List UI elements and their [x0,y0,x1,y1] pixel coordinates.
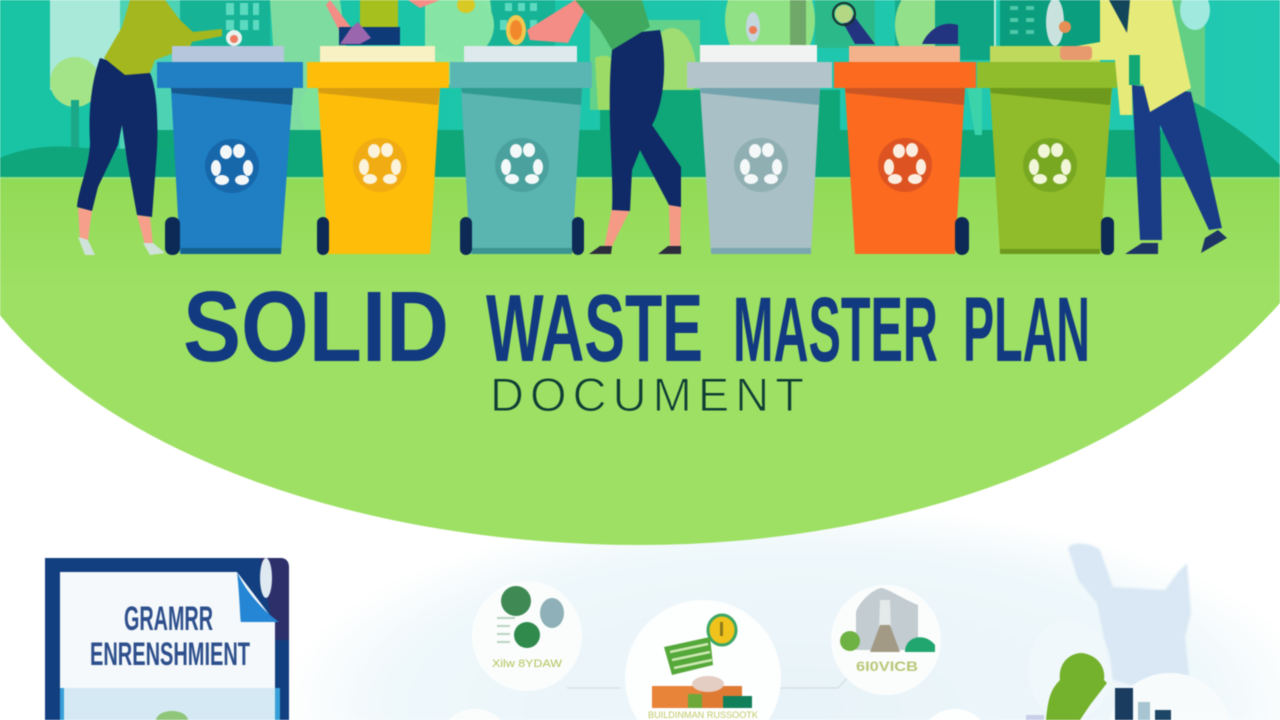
icon: recycling [353,138,407,192]
connector lines [567,675,850,688]
held waste items [226,0,1071,46]
icon: green list [664,637,713,675]
document heading [90,600,250,672]
icon: town [652,676,752,708]
circle: center topic [625,600,781,720]
bin: teal [450,46,592,255]
document heading: GRAMRR [124,600,213,638]
map silhouette [1068,544,1191,690]
title: WASTE [486,275,703,382]
green header dome with scene [0,0,1280,548]
jacket [104,0,222,75]
icon: recycling [734,138,788,192]
legs [78,208,153,245]
document heading: ENRENSHMIENT [90,636,250,672]
icon: recycling [1023,138,1077,192]
trousers [77,58,157,217]
city and tree cluster [1026,653,1230,720]
title: MASTER [733,279,938,381]
buildings left [180,0,555,46]
bottom-right partial circle [929,709,981,720]
lower sheet [60,688,280,720]
circle: right topic: 6I0VICB [856,658,918,674]
icon: recycling [495,138,549,192]
bin: gray [687,45,832,254]
title [183,271,1090,383]
distant block [1026,715,1044,720]
person: right man [1060,0,1227,254]
person: middle woman [575,0,681,254]
icon: recycling [878,138,932,192]
trees [50,0,1210,150]
dome ground [0,178,1280,548]
icon: recycling [205,139,259,193]
circle: right topic [831,585,941,695]
icon: coin [708,615,736,645]
person: center back [326,0,475,45]
bin: yellow [307,46,449,255]
scene background [0,0,1280,179]
person: left woman [77,0,222,255]
icon: facility [840,588,935,652]
bin: orange [834,46,976,255]
icon: tree [1046,653,1107,720]
title: PLAN [963,279,1090,381]
circle: left topic: Xilw 8YDAW [492,658,563,670]
title: SOLID [183,271,449,383]
document panel [45,558,289,720]
circle: center topic: BUILDINMAN RUSSOOTK [648,710,758,720]
bottom-left partial circle [449,709,501,720]
subtitle: DOCUMENT [490,368,804,421]
pale translucent panel behind tree [1028,620,1112,720]
skyline [1115,688,1171,720]
page curl [237,572,279,622]
page [60,572,275,688]
bin: green [977,46,1117,255]
circle: left topic [472,581,582,691]
bin: blue [157,46,303,255]
far teal shapes [1180,102,1280,178]
shoes [78,237,165,255]
